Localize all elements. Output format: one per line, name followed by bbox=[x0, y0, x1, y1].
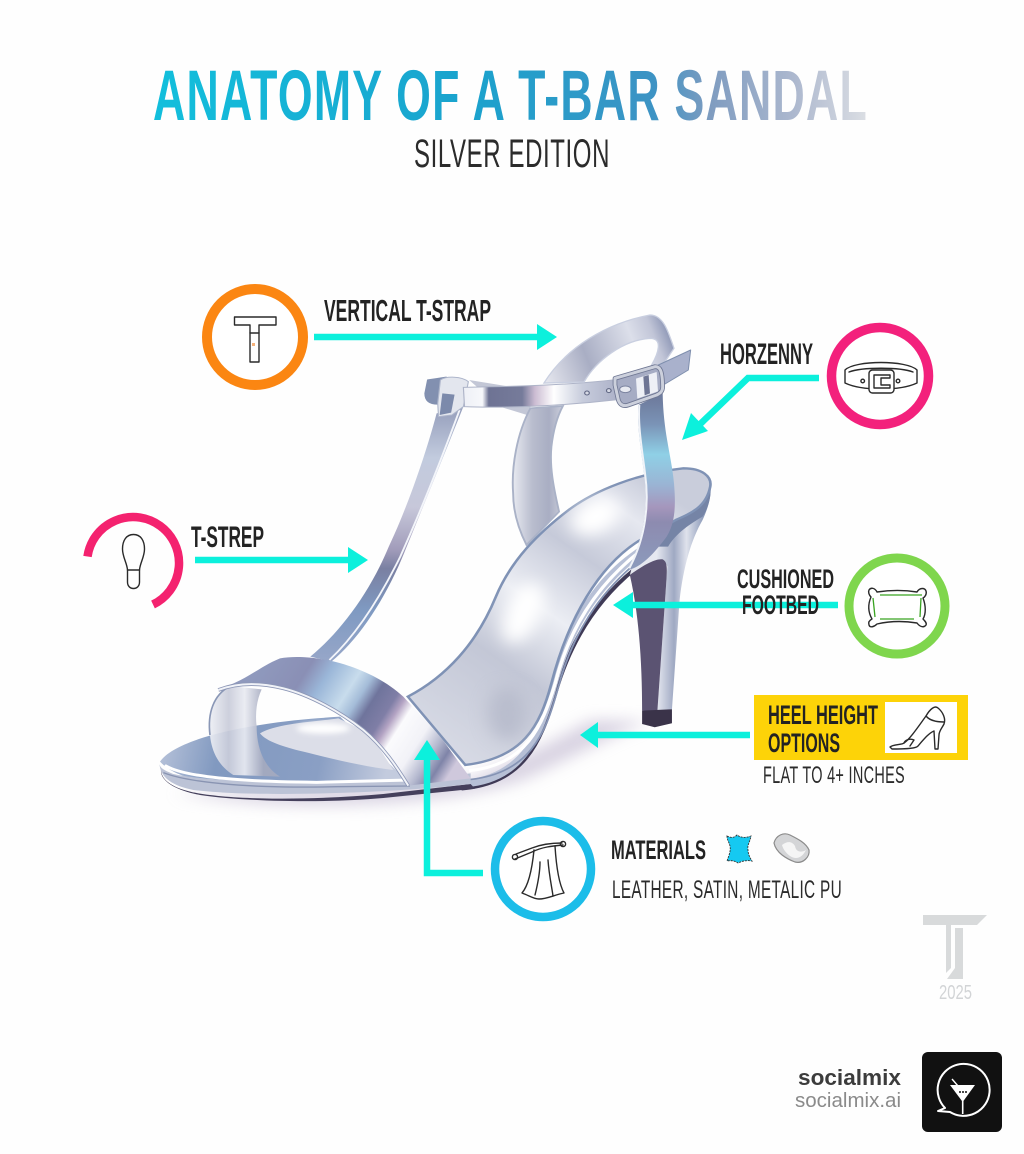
sole rim bbox=[159, 763, 471, 794]
arrow: cushioned footbed bbox=[613, 592, 838, 618]
t-bar loop back bbox=[425, 377, 446, 404]
arch rim bbox=[465, 548, 645, 787]
callout: heel height options bbox=[754, 695, 968, 789]
icon: high heel bbox=[890, 707, 945, 749]
label: vertical t-strap: VERTICAL T-STRAP bbox=[324, 293, 491, 328]
watermark: t logo bbox=[923, 915, 987, 1004]
heading: materials: MATERIALS bbox=[611, 835, 706, 865]
ground shadow bbox=[174, 720, 649, 805]
icon: pillow in green ring bbox=[849, 558, 945, 654]
callout: t-strep bbox=[88, 517, 264, 604]
toe band inner lining bbox=[209, 686, 280, 777]
brand name: socialmix bbox=[798, 1065, 902, 1090]
forefoot footbed bbox=[160, 717, 413, 787]
callout: horzenny bbox=[720, 328, 928, 424]
arrow: materials bbox=[414, 740, 483, 873]
sandal upper back strap and buckle bbox=[544, 315, 691, 570]
sandal illustration bbox=[159, 315, 711, 805]
sole underside dark edge bbox=[161, 770, 475, 801]
forefoot sheen bbox=[260, 718, 393, 770]
yellow label box bbox=[754, 695, 968, 760]
text: material list: LEATHER, SATIN, METALIC PU bbox=[612, 876, 842, 904]
sandal front toe section bbox=[159, 657, 475, 801]
buckle bbox=[615, 367, 663, 406]
heel cup and shank bbox=[630, 483, 711, 711]
rear inner quarter bbox=[513, 406, 563, 545]
sole dark edge bbox=[461, 570, 634, 789]
icon: leather hide bbox=[727, 835, 752, 863]
toe band bbox=[230, 657, 471, 786]
footbed highlights bbox=[488, 490, 628, 740]
heading: heel height options bbox=[768, 700, 878, 758]
icon: fabric in blue ring bbox=[495, 821, 591, 917]
label: cushioned footbed: CUSHIONED bbox=[737, 564, 834, 594]
rim highlights bbox=[469, 552, 639, 771]
label: cushioned footbed: FOOTBED bbox=[742, 590, 819, 620]
label: cushioned footbed bbox=[737, 564, 834, 620]
icon: belt in pink ring bbox=[832, 328, 928, 424]
arrow: t-strep bbox=[195, 547, 368, 573]
toe band edge bbox=[218, 684, 408, 786]
icon: t-strap in orange ring bbox=[207, 289, 303, 385]
heel tip bbox=[642, 709, 672, 727]
heading: heel height options: HEEL HEIGHT bbox=[768, 700, 878, 730]
label: horzenny: HORZENNY bbox=[720, 338, 813, 371]
logo: chat bubble with cocktail glass bbox=[922, 1052, 1002, 1132]
rear vertical strap bbox=[628, 393, 675, 570]
strap holes bbox=[585, 389, 611, 395]
callout: materials bbox=[495, 821, 842, 917]
stiletto heel dark face bbox=[630, 559, 667, 711]
brand name bbox=[795, 1065, 902, 1112]
sole rim shade line bbox=[163, 773, 410, 787]
subtitle: SILVER EDITION bbox=[414, 132, 610, 176]
icon: metallic ring bbox=[774, 834, 809, 862]
sole rim highlight bbox=[166, 766, 410, 782]
brand name: socialmix.ai bbox=[795, 1090, 901, 1112]
text: flat to 4+ inches: FLAT TO 4+ INCHES bbox=[763, 762, 905, 789]
heel cup dark band bbox=[653, 485, 711, 547]
arrow: heel height bbox=[580, 722, 750, 748]
grey lining under ankle strap bbox=[469, 380, 530, 416]
sheen glare bbox=[297, 723, 350, 734]
heel loop strap bbox=[544, 315, 674, 383]
t-strap bbox=[310, 407, 463, 662]
arrow: vertical t-strap bbox=[314, 324, 557, 350]
strap tail bbox=[658, 350, 691, 385]
icon: sole in open pink ring bbox=[88, 517, 179, 604]
label: t-strep: T-STREP bbox=[191, 521, 264, 554]
arrow: horzenny bbox=[682, 378, 819, 440]
sandal rear body bbox=[174, 377, 711, 805]
ankle strap bbox=[463, 379, 620, 407]
footbed insole bbox=[408, 468, 710, 765]
heel thumbnail panel bbox=[885, 702, 957, 753]
t-strap edge bbox=[329, 410, 460, 660]
callout: vertical t-strap bbox=[207, 289, 491, 385]
callout: cushioned footbed bbox=[737, 558, 945, 654]
heading: heel height options: OPTIONS bbox=[768, 728, 840, 758]
t-bar loop front bbox=[438, 377, 468, 417]
watermark year: 2025 bbox=[939, 982, 972, 1004]
